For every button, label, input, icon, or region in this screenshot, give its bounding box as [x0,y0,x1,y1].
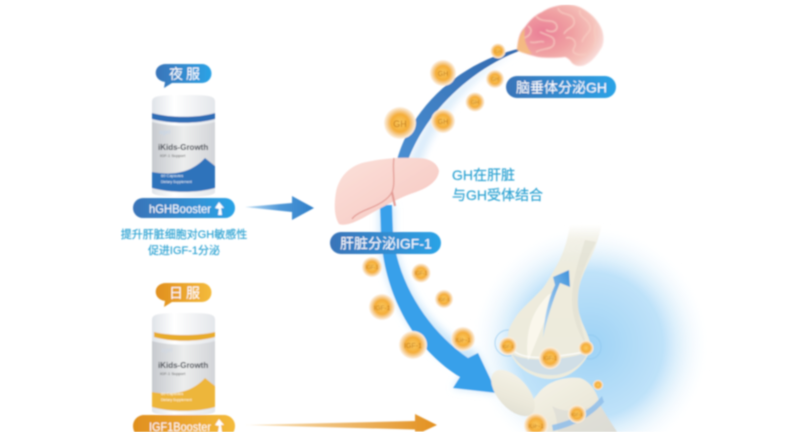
text: night benefit: 促进IGF-1分泌 [148,243,220,257]
curve arrow: brain to liver [397,49,520,165]
bottle: night [152,95,215,197]
arrow: blue to liver [245,196,314,220]
IGF-1 bubbles: IGF-1 [528,424,544,430]
pill: IGF1Booster [133,415,235,432]
IGF-1 bubbles [362,257,603,432]
IGF-1 bubbles: IGF-1 [438,297,450,302]
bottle: day: IGF-1 Support [160,371,186,376]
text: GH binding [452,167,543,203]
GH bubbles: GH [438,119,448,126]
pill: hGHBooster [133,198,235,218]
pill: hGHBooster: hGHBooster [149,202,211,216]
IGF-1 bubbles: IGF-1 [455,338,471,344]
GH bubbles: GH [471,100,479,106]
IGF-1 bubbles: IGF-1 [366,265,379,271]
bottle: day: 60 Capsules [161,391,183,396]
IGF-1 bubbles: IGF-1 [415,271,428,277]
IGF-1 bubbles: IGF-1 [502,344,514,349]
bone: femur [508,224,602,379]
bone: tibia [527,378,617,432]
IGF-1 bubbles: IGF-1 [374,305,391,312]
GH bubbles: GH [393,119,407,129]
IGF-1 bubbles: IGF-1 [543,356,557,362]
speech bubble: night [156,64,212,88]
speech bubble: day: 日服 [169,285,203,301]
text: night benefit [121,227,247,257]
GH bubbles: GH [438,71,448,78]
bottle: night: iKids-Growth [158,143,208,152]
bottle: day [152,313,215,415]
liver [335,158,439,225]
label: pituitary: 脑垂体分泌GH [516,80,607,96]
curve arrow: liver to knee [379,205,497,393]
text: night benefit: 提升肝脏细胞对GH敏感性 [121,227,247,241]
GH bubbles: GH [495,49,501,54]
bottle: night: Dietary Supplement [161,180,192,184]
glow behind knee [468,223,712,432]
speech bubble: day [156,283,212,307]
label: liver IGF-1 [330,232,441,254]
label: pituitary [506,76,616,98]
label: liver IGF-1: 肝脏分泌IGF-1 [340,236,432,252]
bone: patella [483,362,543,424]
text: GH binding: 与GH受体结合 [452,187,543,203]
brain [517,5,604,66]
speech bubble: night: 夜服 [169,66,203,82]
bottle: night: 60 Capsules [161,173,183,178]
text: GH binding: GH在肝脏 [452,167,515,183]
arrow: bone growth [543,270,570,338]
IGF-1 bubbles: IGF-1 [404,343,422,350]
bottle: night: IGF-1 Support [160,153,186,158]
joint rings [495,330,601,359]
bottle: day: iKids-Growth [158,361,208,370]
GH bubbles [384,44,506,139]
bottle: night: agel [159,130,170,136]
bottle: day: agel [161,348,172,354]
arrow: orange to knee [245,414,437,432]
IGF-1 bubbles: IGF-1 [571,412,583,417]
bottle: day: Dietary Supplement [161,398,192,402]
GH bubbles: GH [491,77,499,83]
